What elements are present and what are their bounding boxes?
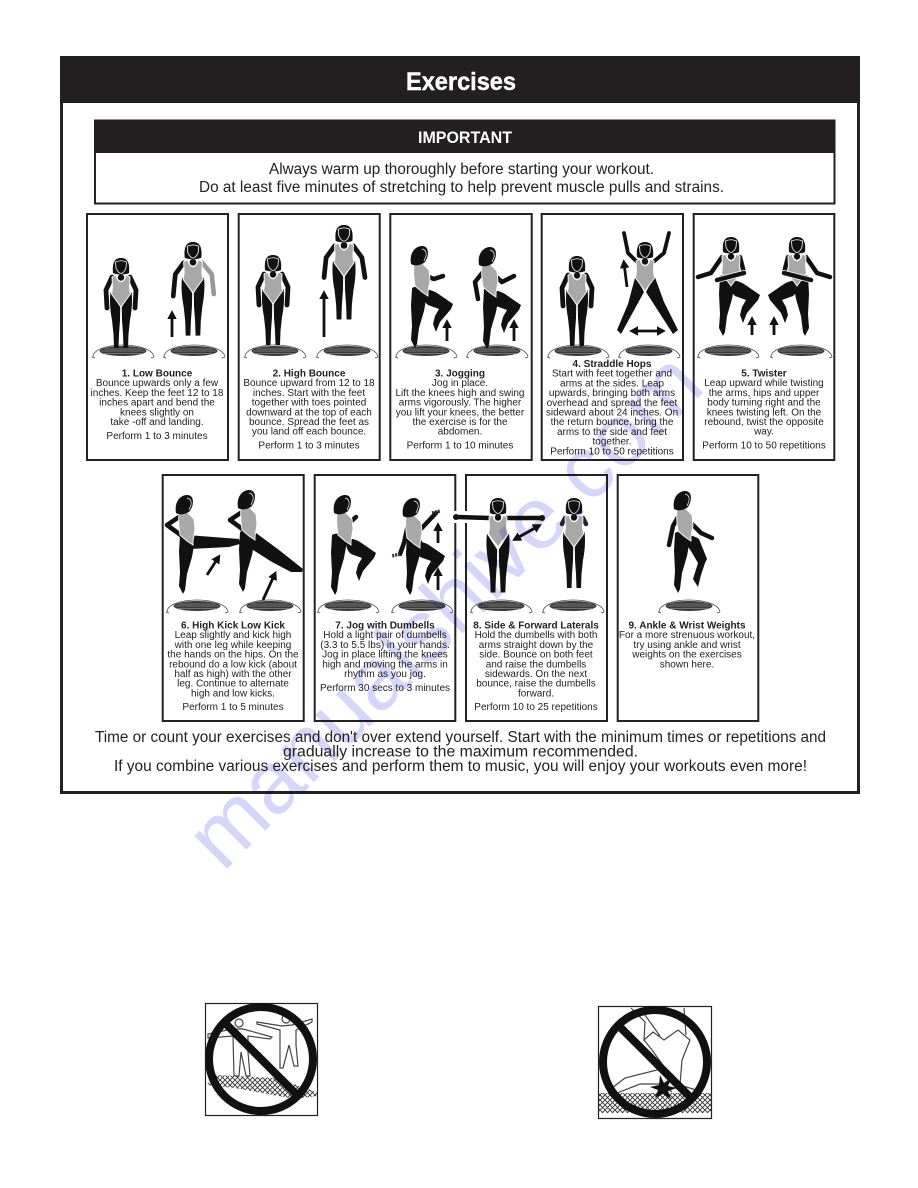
exercise text: together. bbox=[593, 437, 631, 448]
exercise text: Perform 1 to 3 minutes bbox=[106, 431, 208, 442]
exercise text: the return bounce, bring the bbox=[551, 417, 674, 428]
figure: low kick bbox=[230, 490, 303, 592]
panel: 9. Ankle and Wrist Weights bbox=[618, 475, 758, 721]
figure: low jump bbox=[173, 242, 214, 336]
exercise text: the hands on the hips. On the bbox=[167, 650, 299, 661]
exercise text: 6. High Kick Low Kick bbox=[181, 620, 285, 632]
figure: high jump bbox=[324, 225, 365, 320]
exercise text: shown here. bbox=[660, 659, 714, 670]
panel: 3. Jogging bbox=[390, 214, 532, 460]
panel: 2. High Bounce bbox=[239, 214, 380, 460]
exercise text: Hold the dumbells with both bbox=[475, 630, 597, 641]
figure: forward lateral bbox=[562, 498, 586, 588]
closing advice text: Time or count your exercises and don't over extend yourself. Start with the minimum times or repetitions and bbox=[95, 729, 826, 746]
figure: standing bbox=[258, 255, 288, 345]
trampoline illustrations bbox=[697, 345, 832, 358]
exercise text: upwards, bringing both arms bbox=[549, 388, 675, 399]
exercise text: (3.3 to 5.5 lbs) in your hands. bbox=[320, 640, 450, 651]
icon box bbox=[206, 1004, 318, 1116]
exercise text: 8. Side & Forward Laterals bbox=[473, 620, 599, 632]
exercise text: Perform 10 to 50 repetitions bbox=[702, 440, 826, 452]
panel: 4. Straddle Hops bbox=[542, 214, 683, 460]
arrow diagonal up bbox=[624, 267, 627, 287]
exercise text: 1. Low Bounce bbox=[122, 368, 193, 380]
panel frame bbox=[315, 475, 455, 721]
exercise text: Bounce upward from 12 to 18 bbox=[243, 378, 375, 389]
exercise text: sideward about 24 inches. On bbox=[546, 408, 678, 418]
exercise text: Perform 10 to 50 repetitions bbox=[550, 446, 674, 457]
exercise text: arms to the side and feet bbox=[557, 427, 667, 438]
panel: 8. Side and Forward Laterals bbox=[453, 475, 607, 721]
notice text: Always warm up thoroughly before starting your workout. bbox=[269, 161, 654, 178]
trampoline illustrations bbox=[470, 600, 604, 613]
exercise text: Perform 1 to 3 minutes bbox=[258, 440, 360, 452]
arrows up bbox=[447, 327, 514, 341]
figure: twist left bbox=[768, 237, 830, 336]
exercise text: Perform 30 secs to 3 minutes bbox=[320, 683, 450, 694]
exercise text: Leap upward while twisting bbox=[704, 378, 824, 389]
notice heading bar bbox=[94, 120, 835, 153]
exercise text: 3. Jogging bbox=[435, 368, 485, 380]
exercise text: way. bbox=[753, 427, 774, 438]
arrows up bbox=[437, 530, 439, 590]
panel frame bbox=[390, 214, 532, 460]
figure: side lateral bbox=[453, 498, 545, 592]
panel frame bbox=[239, 214, 380, 460]
exercise text: the arms, hips and upper bbox=[709, 388, 820, 399]
arrow up bbox=[323, 298, 325, 337]
figure: jogging one bbox=[411, 246, 453, 348]
exercise text: arms at the sides. Leap bbox=[560, 378, 664, 389]
exercise text: knees twisting left. On the bbox=[707, 407, 822, 418]
arrows up bbox=[752, 324, 774, 335]
exercise text: arms straight down by the bbox=[479, 640, 594, 651]
panel frame bbox=[466, 475, 607, 721]
exercise text: Bounce upwards only a few bbox=[96, 378, 219, 389]
exercise text: bounce, raise the dumbells bbox=[476, 679, 596, 690]
trampoline illustrations bbox=[92, 345, 225, 358]
prohibition sign bbox=[603, 1010, 707, 1114]
main frame bbox=[62, 58, 858, 792]
panel frame bbox=[87, 214, 228, 460]
trampoline illustrations bbox=[317, 600, 453, 613]
exercise text: high and low kicks. bbox=[191, 688, 275, 699]
panel frame bbox=[163, 475, 304, 721]
exercise text: body turning right and the bbox=[707, 398, 821, 409]
exercise text: together with toes pointed bbox=[252, 398, 366, 409]
exercise text: Leap slightly and kick high bbox=[175, 630, 291, 641]
exercise text: Perform 1 to 10 minutes bbox=[407, 440, 513, 452]
panel frame bbox=[618, 475, 758, 721]
exercise text: you lift your knees, the better bbox=[396, 407, 525, 418]
exercise text: weights on the exercises bbox=[631, 650, 742, 661]
arrow double horizontal bbox=[637, 330, 658, 332]
trampoline illustrations bbox=[166, 600, 301, 613]
exercise text: you land off each bounce. bbox=[252, 427, 366, 438]
closing advice text: gradually increase to the maximum recommended. bbox=[283, 744, 638, 760]
prohibition sign bbox=[209, 1007, 313, 1111]
exercise text: Perform 1 to 5 minutes bbox=[182, 702, 284, 713]
figure: jog with dumbbells two bbox=[392, 498, 445, 595]
panel: important notice bbox=[94, 120, 835, 204]
foot outline bbox=[612, 1008, 696, 1095]
exercise text: inches. Keep the feet 12 to 18 bbox=[91, 388, 224, 399]
notice text: Do at least five minutes of stretching to help prevent muscle pulls and strains. bbox=[199, 179, 724, 196]
trampoline mat bbox=[206, 1075, 317, 1099]
exercise text: Jog in place lifting the knees bbox=[322, 650, 448, 661]
exercise text: inches apart and bend the bbox=[99, 398, 215, 409]
impact star bbox=[650, 1075, 677, 1099]
trampoline illustrations bbox=[547, 345, 680, 358]
exercise text: rebound, twist the opposite bbox=[704, 417, 824, 428]
exercise text: rhythm as you jog. bbox=[344, 669, 426, 680]
exercise text: the exercise is for the bbox=[412, 417, 508, 428]
trampoline illustration bbox=[658, 600, 720, 613]
header bar bbox=[60, 56, 860, 103]
exercise text: 2. High Bounce bbox=[273, 368, 346, 380]
figure: straddle jump bbox=[617, 233, 678, 334]
panel: 5. Twister bbox=[694, 214, 834, 460]
closing advice text: If you combine various exercises and perform them to music, you will enjoy your workouts even more! bbox=[114, 758, 807, 775]
exercise text: and raise the dumbells bbox=[486, 659, 586, 670]
trampoline mat bbox=[599, 1093, 711, 1113]
figure: jumping with weights bbox=[669, 491, 712, 593]
figure: twist right bbox=[698, 237, 760, 336]
panel: 6. High Kick Low Kick bbox=[163, 475, 304, 721]
exercise text: with one leg while keeping bbox=[174, 640, 291, 651]
watermark: manualshive.com bbox=[166, 332, 721, 886]
figure: standing bbox=[106, 258, 136, 348]
exercise text: forward. bbox=[518, 688, 554, 699]
exercise text: Hold a light pair of dumbells bbox=[323, 630, 447, 641]
notice heading: IMPORTANT bbox=[418, 129, 512, 147]
exercise text: overhead and spread the feet bbox=[547, 398, 678, 409]
exercise text: 4. Straddle Hops bbox=[573, 359, 652, 370]
exercise text: 7. Jog with Dumbells bbox=[335, 620, 435, 632]
exercise text: leg. Continue to alternate bbox=[177, 679, 289, 690]
exercise text: Perform 10 to 25 repetitions bbox=[474, 702, 598, 713]
exercise text: side. Bounce on both feet bbox=[479, 650, 593, 661]
trampoline illustrations bbox=[244, 345, 378, 358]
exercise text: arms vigorously. The higher bbox=[399, 398, 522, 409]
notice frame bbox=[95, 120, 834, 204]
exercise text: Lift the knees high and swing bbox=[396, 388, 524, 399]
exercise text: take -off and landing. bbox=[110, 417, 204, 428]
icon box bbox=[598, 1006, 712, 1118]
figure: jogging two bbox=[475, 247, 521, 349]
exercise text: 5. Twister bbox=[741, 368, 787, 380]
exercise text: rebound do a low kick (about bbox=[169, 659, 297, 670]
exercise text: abdomen. bbox=[438, 427, 482, 438]
panel: 1. Low Bounce bbox=[87, 214, 228, 460]
exercise text: inches. Start with the feet bbox=[253, 388, 365, 399]
exercise text: 9. Ankle & Wrist Weights bbox=[628, 620, 746, 632]
panel frame bbox=[542, 214, 683, 460]
exercise text: knees slightly on bbox=[120, 407, 194, 418]
arrows diagonal bbox=[207, 561, 273, 600]
exercise text: half as high) with the other bbox=[174, 669, 292, 680]
exercise text: try using ankle and wrist bbox=[633, 640, 741, 651]
icon: no arms outstretched on trampoline bbox=[206, 1004, 318, 1116]
exercise text: high and moving the arms in bbox=[322, 659, 448, 670]
exercise text: sidewards. On the next bbox=[485, 669, 587, 680]
icon: no landing on ankle bbox=[598, 1006, 712, 1118]
frame gap behind arm bbox=[453, 511, 468, 523]
exercise text: Jog in place. bbox=[432, 378, 488, 389]
title: Exercises bbox=[406, 68, 516, 96]
arrow double diagonal bbox=[519, 528, 535, 537]
figures outline bbox=[208, 1015, 312, 1076]
arrow up bbox=[171, 318, 173, 337]
exercise text: bounce. Spread the feet as bbox=[249, 417, 369, 428]
exercise text: Start with feet together and bbox=[552, 369, 672, 380]
figure: high kick bbox=[167, 495, 240, 594]
figure: standing bbox=[562, 256, 592, 346]
exercise text: downward at the top of each bbox=[246, 407, 372, 418]
trampoline illustrations bbox=[395, 345, 528, 358]
figure: jog with dumbbells one bbox=[331, 495, 376, 595]
panel: 7. Jog with Dumbells bbox=[315, 475, 455, 721]
exercise text: For a more strenuous workout, bbox=[619, 630, 755, 641]
panel frame bbox=[694, 214, 834, 460]
